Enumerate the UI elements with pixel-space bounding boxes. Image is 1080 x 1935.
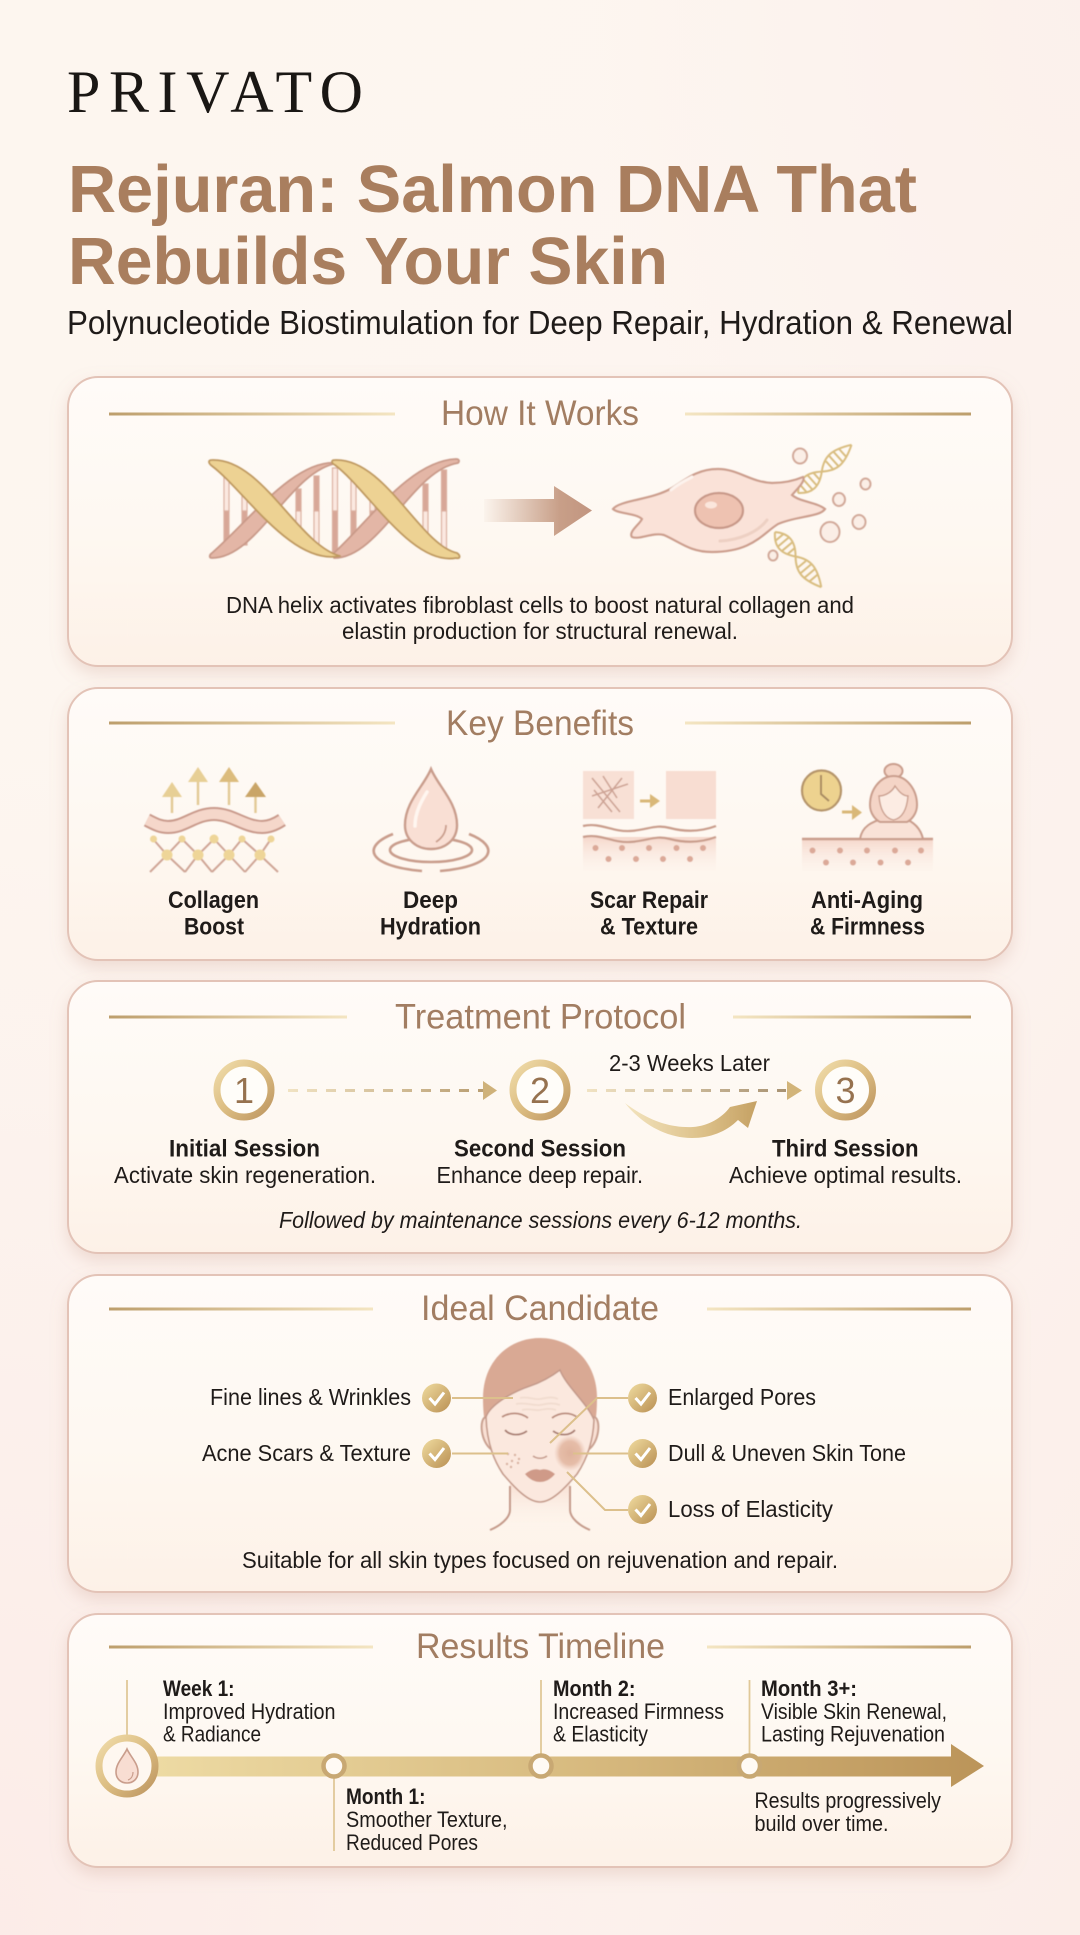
step 1 text: [114, 1136, 376, 1188]
logo: PRIVATO: PRIVATO: [67, 59, 363, 125]
milestone: month 2: Month 2:: [553, 1676, 636, 1701]
label: anti-aging and firmness: & Firmness: [810, 914, 925, 940]
milestone: week 1: Week 1:: [163, 1676, 234, 1701]
item: fine lines and wrinkles: Fine lines & Wrinkles: [210, 1384, 411, 1410]
description: [226, 592, 854, 644]
timeline note: Results progressively: [754, 1788, 941, 1813]
milestone: month 2: [553, 1676, 724, 1746]
icon: anti-aging and firmness: [802, 764, 933, 871]
label: deep hydration: Deep: [403, 887, 458, 914]
panel: results timeline: [68, 1614, 1012, 1867]
milestone: week 1: Improved Hydration: [163, 1699, 336, 1724]
step 1 badge: 1: [234, 1070, 254, 1111]
milestone: month 1: [346, 1784, 508, 1855]
icon: collagen boost: [147, 767, 282, 872]
label: scar repair and texture: & Texture: [600, 914, 698, 940]
icon: DNA helix: [209, 459, 460, 559]
milestone: week 1: [163, 1676, 336, 1746]
start marker with drop icon: [99, 1738, 155, 1794]
milestone: month 3+: Visible Skin Renewal,: [761, 1699, 947, 1724]
step 2 text: Enhance deep repair.: [436, 1162, 643, 1188]
milestone: month 3+: [761, 1676, 947, 1746]
description: elastin production for structural renewal.: [342, 618, 738, 644]
step 2 text: [436, 1136, 643, 1188]
icon: fibroblast cell with DNA fragments: [613, 439, 870, 592]
timeline note: [754, 1788, 941, 1836]
heading: how it works: How It Works: [441, 394, 639, 433]
maintenance note: Followed by maintenance sessions every 6-12 months.: [279, 1207, 802, 1233]
label: deep hydration: [380, 887, 481, 940]
label: anti-aging and firmness: Anti-Aging: [811, 887, 923, 914]
connector lines: [452, 1398, 628, 1510]
label: scar repair and texture: Scar Repair: [590, 887, 708, 914]
milestone: month 1: Smoother Texture,: [346, 1807, 508, 1832]
milestone: month 2: Increased Firmness: [553, 1699, 724, 1724]
item: enlarged pores: Enlarged Pores: [668, 1384, 816, 1410]
title: Rejuran: Salmon DNA That: [68, 152, 917, 227]
item: dull and uneven skin tone: Dull & Uneven Skin Tone: [668, 1440, 906, 1466]
description: DNA helix activates fibroblast cells to boost natural collagen and: [226, 592, 854, 618]
heading: treatment protocol: Treatment Protocol: [395, 998, 686, 1036]
panel: ideal candidate: [68, 1275, 1012, 1592]
illustration: face: [482, 1338, 598, 1530]
step 2 text: Second Session: [454, 1136, 626, 1162]
subtitle: Polynucleotide Biostimulation for Deep Repair, Hydration & Renewal: [67, 304, 1013, 341]
milestone: month 2: & Elasticity: [553, 1722, 648, 1746]
dashed arrow: step 1 to 2: [288, 1081, 497, 1100]
step 3 badge: 3: [835, 1070, 856, 1111]
dashed arrow: step 2 to 3: [587, 1081, 802, 1100]
timeline note: build over time.: [754, 1811, 888, 1836]
step 2 badge: 2: [530, 1070, 550, 1111]
item: enlarged pores: [628, 1384, 816, 1412]
icon: scar repair and texture: [583, 771, 716, 871]
label: scar repair and texture: [590, 887, 708, 940]
milestone nodes: [324, 1756, 760, 1776]
curved arrow: [625, 1101, 757, 1138]
step 3 text: Achieve optimal results.: [729, 1162, 962, 1188]
heading: ideal candidate: Ideal Candidate: [421, 1289, 659, 1328]
panel: treatment protocol: [68, 981, 1012, 1253]
milestone: month 1: Month 1:: [346, 1784, 426, 1809]
label: collagen boost: Boost: [184, 914, 244, 940]
arrow: DNA to cell: [484, 486, 592, 536]
item: loss of elasticity: Loss of Elasticity: [668, 1496, 833, 1522]
milestone: month 3+: Month 3+:: [761, 1676, 857, 1701]
step 2 badge: [513, 1063, 567, 1117]
title: Rebuilds Your Skin: [68, 224, 668, 299]
step 3 badge: [818, 1063, 872, 1117]
timeline arrow bar: [150, 1744, 984, 1787]
step 1 text: Activate skin regeneration.: [114, 1162, 376, 1188]
step 1 text: Initial Session: [169, 1136, 320, 1162]
suitability note: Suitable for all skin types focused on rejuvenation and repair.: [242, 1547, 838, 1573]
label: deep hydration: Hydration: [380, 914, 481, 940]
panel: how it works: [68, 377, 1012, 666]
label: anti-aging and firmness: [810, 887, 925, 940]
panel: key benefits: [68, 688, 1012, 960]
icon: deep hydration drop: [374, 769, 488, 871]
milestone: month 3+: Lasting Rejuvenation: [761, 1722, 945, 1746]
step 3 text: Third Session: [772, 1136, 918, 1162]
step 1 badge: [217, 1063, 271, 1117]
label: collagen boost: Collagen: [168, 887, 259, 914]
milestone: month 1: Reduced Pores: [346, 1830, 478, 1855]
item: acne scars and texture: Acne Scars & Texture: [202, 1440, 411, 1466]
milestone: week 1: & Radiance: [163, 1722, 261, 1746]
stem lines: [127, 1680, 750, 1851]
step 3 text: [729, 1136, 962, 1188]
heading: results timeline: Results Timeline: [416, 1627, 665, 1666]
label: collagen boost: [168, 887, 259, 940]
title: [68, 152, 917, 299]
heading: key benefits: Key Benefits: [446, 704, 634, 743]
interval label: 2-3 Weeks Later: [609, 1050, 770, 1076]
